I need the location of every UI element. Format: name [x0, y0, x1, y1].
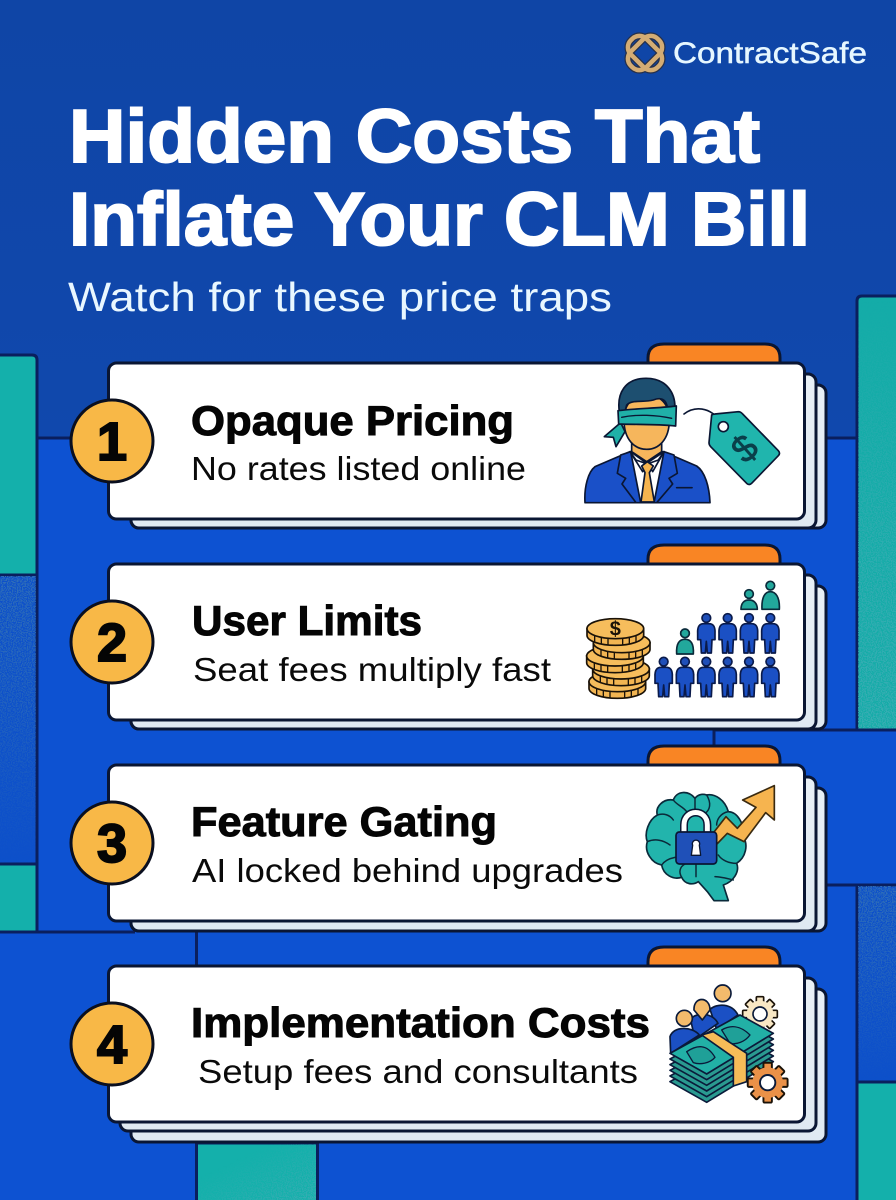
panel: right colour blocks [714, 296, 896, 1200]
subheading: Seat fees multiply fast [193, 651, 551, 688]
icon: coins and growing users [587, 581, 779, 698]
card face [108, 966, 804, 1122]
number badge 4: 4 [97, 1015, 127, 1075]
number badge 1: 1 [97, 412, 127, 472]
gear upper [743, 997, 777, 1031]
heading: User Limits [192, 597, 422, 644]
coin stack [587, 619, 650, 698]
subheading: AI locked behind upgrades [192, 852, 623, 889]
icon: blindfolded man with price tag: $ [723, 426, 766, 471]
subheading: Setup fees and consultants [198, 1053, 638, 1090]
team [670, 985, 738, 1053]
icon: team, cash stack and gears [670, 985, 788, 1103]
panel: left colour blocks [0, 355, 196, 966]
icon: blindfolded man with price tag [585, 378, 779, 503]
number badge 2: 2 [97, 613, 127, 673]
subtitle: Watch for these price traps [68, 274, 612, 320]
orange tab [648, 947, 780, 970]
orange tab [648, 746, 780, 769]
panel: card 4 implementation costs [71, 947, 826, 1142]
orange tab [648, 344, 780, 366]
logo wordmark: ContractSafe [673, 37, 867, 70]
title: Inflate Your CLM Bill [69, 177, 810, 261]
panel: card 2 user limits [71, 545, 826, 729]
stacked paper layers [131, 777, 826, 931]
coin stack: $ [610, 619, 621, 641]
number badge 3 [71, 802, 153, 884]
logo: ContractSafe [624, 32, 867, 74]
panel: card 1 opaque pricing [71, 344, 826, 528]
panel: bottom teal block [196, 1143, 318, 1200]
card face [108, 765, 804, 921]
number badge 4 [71, 1003, 153, 1085]
heading: Feature Gating [191, 798, 497, 845]
stacked paper layers [131, 575, 826, 729]
number badge 1 [71, 400, 153, 482]
subheading: No rates listed online [191, 450, 526, 487]
stacked paper layers [131, 374, 826, 528]
gear lower [748, 1063, 788, 1103]
title: Hidden Costs That [69, 94, 760, 178]
heading: Opaque Pricing [191, 397, 514, 444]
cash stack [670, 1015, 773, 1102]
heading: Implementation Costs [191, 999, 650, 1046]
stacked paper layers [120, 978, 826, 1142]
icon: interlocked logo mark [624, 32, 666, 74]
title [69, 94, 810, 261]
icon: brain with lock and arrow [646, 786, 774, 901]
orange tab [648, 545, 780, 567]
number badge 3: 3 [97, 814, 127, 874]
card face [108, 564, 804, 720]
panel: card 3 feature gating [71, 746, 826, 931]
card face [108, 363, 804, 519]
number badge 2 [71, 601, 153, 683]
user rows [655, 581, 779, 697]
